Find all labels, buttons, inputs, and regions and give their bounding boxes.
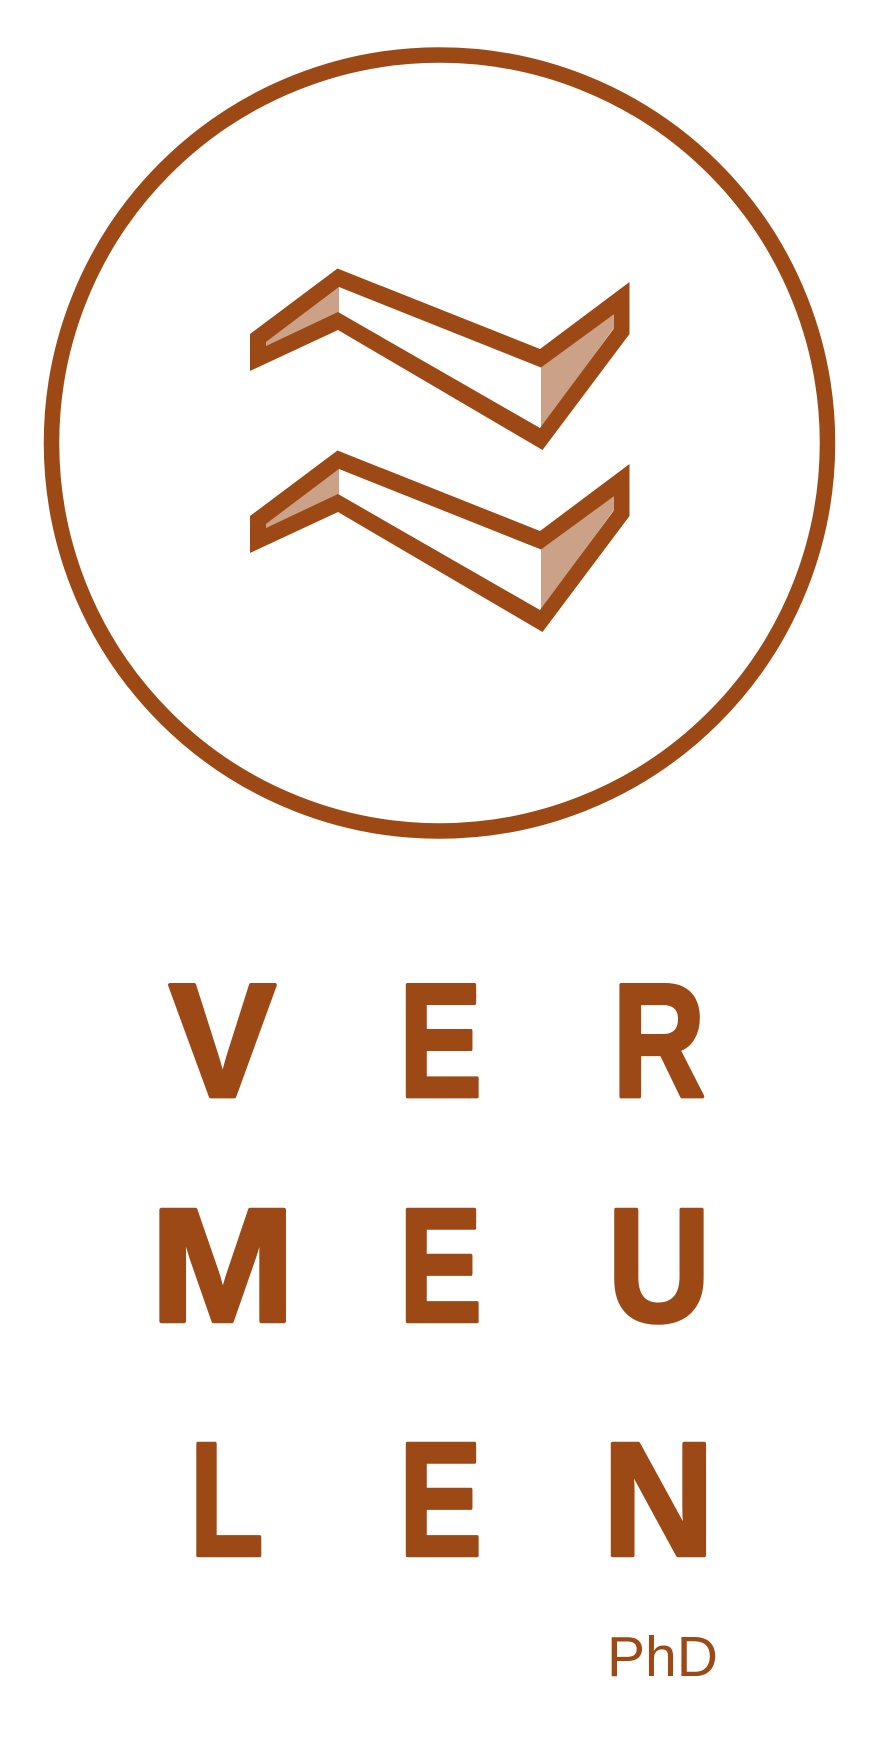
letter M: M	[150, 1174, 296, 1356]
letter U: U	[607, 1176, 711, 1356]
icon: upper chevron ribbon	[250, 268, 630, 450]
letter L: L	[190, 1410, 264, 1590]
letter N: N	[602, 1408, 715, 1590]
icon: lower chevron ribbon	[250, 450, 630, 632]
letter V: V	[169, 951, 276, 1132]
letter E, row three: E	[399, 1408, 482, 1590]
letter R: R	[612, 950, 705, 1131]
letter E, row one: E	[399, 949, 482, 1131]
text: PhD suffix: PhD	[607, 1625, 718, 1689]
wordmark: VERMEULEN letter grid	[150, 949, 715, 1590]
letter E, row two: E	[399, 1174, 482, 1356]
icon: circle ring	[52, 55, 828, 831]
